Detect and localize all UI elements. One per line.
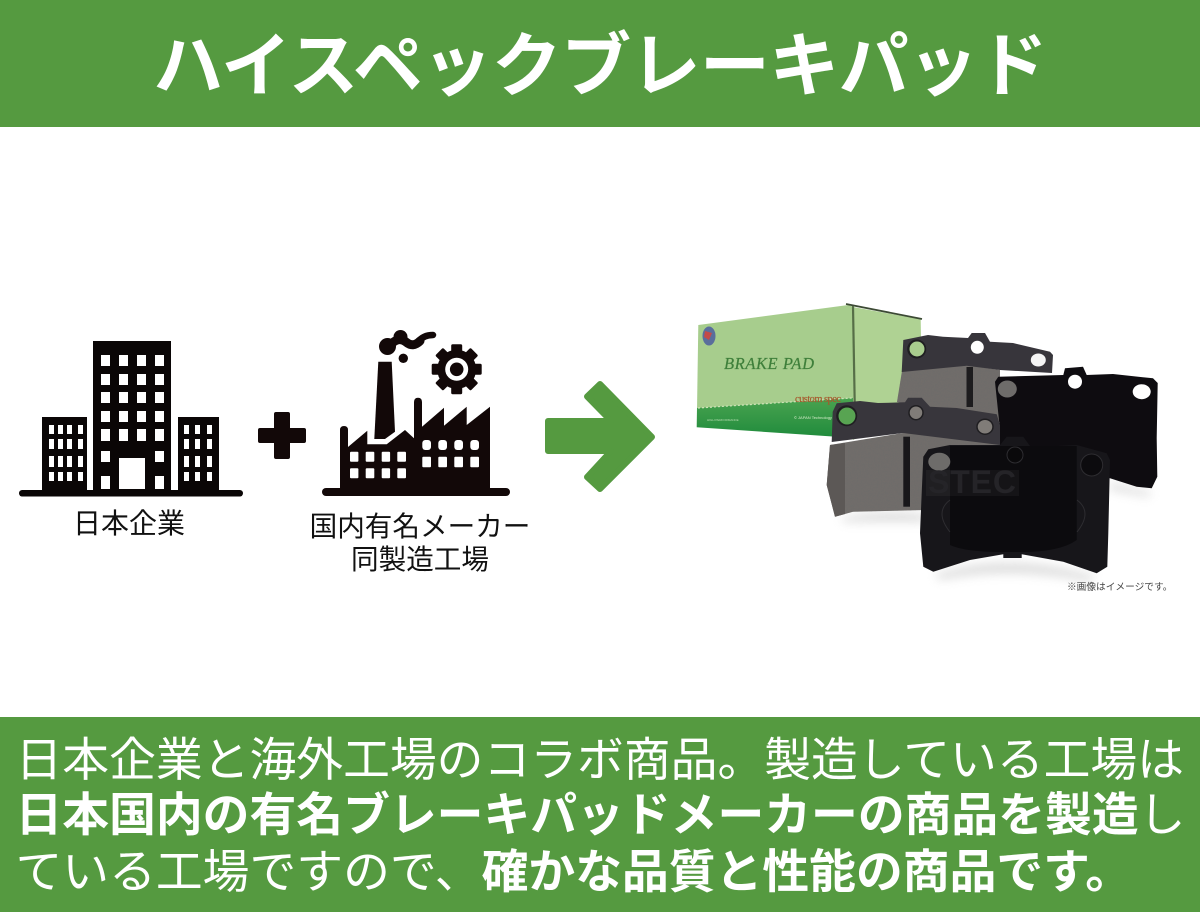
back-right pad [995, 367, 1158, 488]
gear [432, 344, 482, 394]
front-right pad [920, 437, 1110, 573]
box [697, 304, 922, 440]
description line 2: 日本国内の有名ブレーキパッドメーカーの商品を製造し [16, 789, 1185, 841]
box: custom spec [795, 394, 841, 405]
label: domestic maker factory [310, 511, 530, 575]
chimney [374, 362, 395, 439]
factory windows [350, 440, 479, 478]
label: Japanese company: 日本企業 [73, 508, 185, 539]
label: domestic maker factory: 国内有名メーカー [310, 511, 530, 542]
icon: office buildings [19, 341, 243, 496]
description line 3: ている工場ですので、確かな品質と性能の商品です。 [16, 846, 1132, 898]
arrow [545, 381, 655, 492]
title banner [0, 0, 1200, 127]
smoke [379, 330, 433, 363]
pad shadows [840, 482, 1152, 582]
factory body [340, 398, 490, 490]
image note: ※画像はイメージです。 [1067, 580, 1172, 593]
box: HIGH PERFORMANCE [707, 418, 739, 422]
box: © JAPAN Technology [794, 415, 832, 420]
product photo: brake pad box and pads [696, 303, 1172, 593]
box logo [702, 326, 716, 346]
icon: plus [258, 412, 306, 459]
watermark: STEC [928, 464, 1016, 500]
description line 1: 日本企業と海外工場のコラボ商品。製造している工場は [16, 734, 1184, 786]
label: domestic maker factory: 同製造工場 [351, 544, 489, 575]
front-left pad [827, 398, 1000, 517]
description panel [0, 717, 1200, 912]
icon: factory with gear and smoke [322, 330, 510, 496]
back-left pad [897, 333, 1053, 422]
title: ハイスペックブレーキパッド [153, 27, 1047, 105]
box text: BRAKE PAD [724, 354, 814, 373]
